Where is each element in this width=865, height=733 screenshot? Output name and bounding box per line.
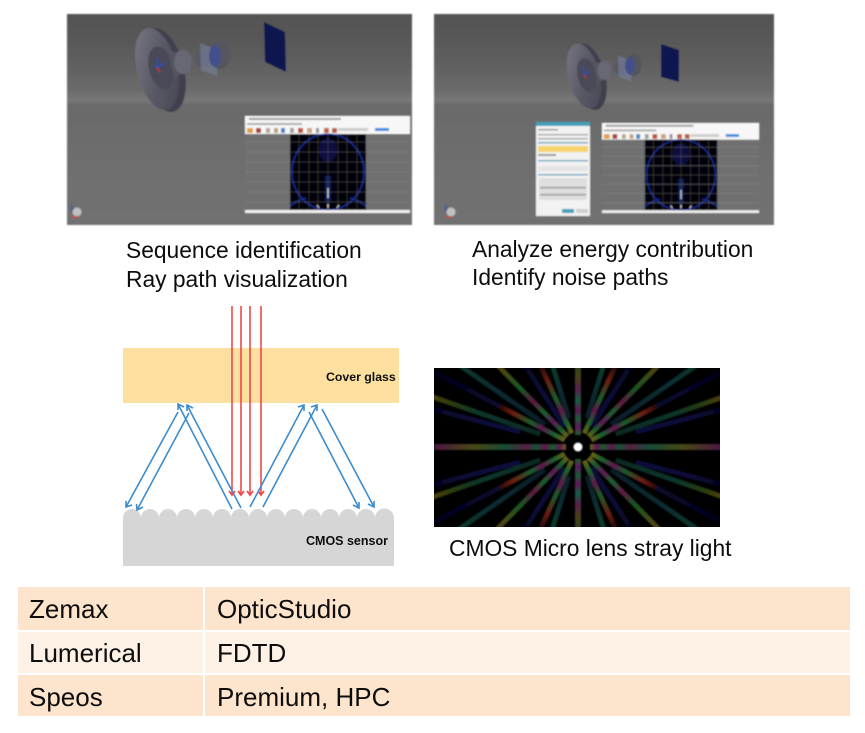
row: Lumerical FDTD: FDTD — [217, 638, 286, 668]
ray database window small — [602, 123, 759, 213]
label: cover glass: Cover glass — [326, 370, 396, 384]
row: Zemax OpticStudio — [18, 587, 850, 630]
icon: sensor plane — [264, 22, 286, 72]
icon: lens assembly — [127, 23, 230, 117]
caption: energy contribution — [472, 236, 753, 290]
panel: energy contribution screenshot — [434, 14, 774, 225]
caption: sequence identification: Ray path visualization — [126, 266, 348, 292]
panel: ray path visualization screenshot — [67, 14, 412, 225]
chart: micro lens stray light diffraction pattern — [434, 368, 720, 527]
CMOS sensor with micro lenses — [123, 509, 394, 566]
icon: sensor plane small — [661, 44, 679, 82]
row: Speos Premium, HPC: Speos — [29, 682, 103, 712]
diagram: cover glass and CMOS sensor — [123, 306, 399, 566]
caption: sequence identification — [126, 237, 362, 292]
dialog window — [536, 122, 590, 216]
row: Zemax OpticStudio: Zemax — [29, 594, 108, 624]
cover glass layer — [123, 348, 399, 403]
caption: energy contribution: Analyze energy contribution — [472, 236, 753, 262]
row: Speos Premium, HPC: Premium, HPC — [217, 682, 390, 712]
icon: axis triad — [71, 205, 82, 218]
row: Zemax OpticStudio: OpticStudio — [217, 594, 351, 624]
row: Speos Premium, HPC — [18, 675, 850, 716]
icon: lens assembly small — [561, 40, 642, 114]
caption: sequence identification: Sequence identification — [126, 237, 362, 263]
caption: CMOS micro lens stray light: CMOS Micro lens stray light — [449, 535, 732, 561]
label: CMOS sensor: CMOS sensor — [306, 534, 388, 548]
row: Lumerical FDTD: Lumerical — [29, 638, 142, 668]
icon: axis triad small — [445, 205, 456, 218]
bright centre spot — [574, 442, 582, 452]
row: Lumerical FDTD — [18, 632, 850, 673]
blue reflected rays — [126, 404, 374, 510]
table: software list — [18, 587, 850, 716]
ray database window — [245, 116, 410, 213]
caption: energy contribution: Identify noise paths — [472, 264, 668, 290]
red incident rays — [229, 306, 264, 495]
